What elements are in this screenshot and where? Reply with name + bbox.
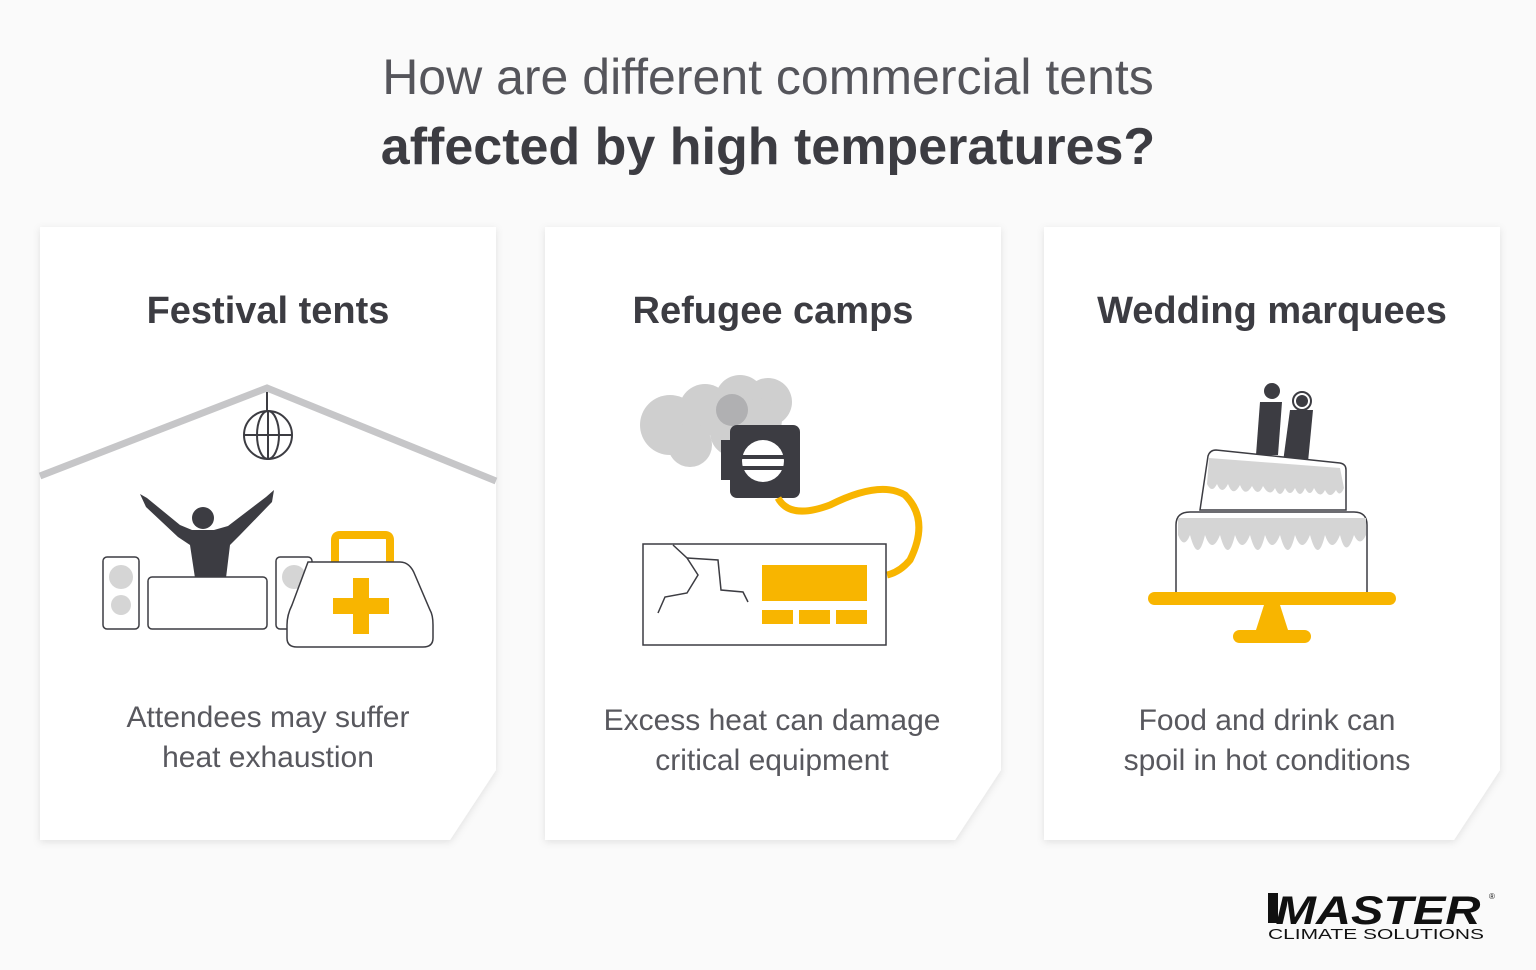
icon: generator <box>640 375 919 645</box>
icon: festival scene <box>40 388 496 647</box>
text block <box>1124 704 1410 777</box>
text block: spoil in hot conditions <box>1124 744 1410 777</box>
logo <box>1268 889 1495 943</box>
title: How are different commercial tents <box>382 49 1154 105</box>
text block: heat exhaustion <box>162 741 374 774</box>
panel: wedding marquees: Wedding marquees <box>1097 290 1447 332</box>
text block: Excess heat can damage <box>604 704 940 737</box>
panel: wedding marquees <box>1044 227 1500 840</box>
logo: ® <box>1489 892 1495 901</box>
title: affected by high temperatures? <box>381 118 1155 176</box>
text block <box>127 701 409 774</box>
panel: festival tents: Festival tents <box>147 290 389 332</box>
text block: Food and drink can <box>1139 704 1395 737</box>
panel: refugee camps <box>545 227 1001 840</box>
logo: CLIMATE SOLUTIONS <box>1268 926 1484 943</box>
logo: MASTER <box>1276 889 1481 933</box>
icon: melting cake <box>1148 383 1396 643</box>
text block <box>604 704 940 777</box>
text block: critical equipment <box>655 744 889 777</box>
text block: Attendees may suffer <box>127 701 409 734</box>
title <box>381 49 1155 176</box>
panel: refugee camps: Refugee camps <box>633 290 913 332</box>
panel: festival tents <box>40 227 496 840</box>
